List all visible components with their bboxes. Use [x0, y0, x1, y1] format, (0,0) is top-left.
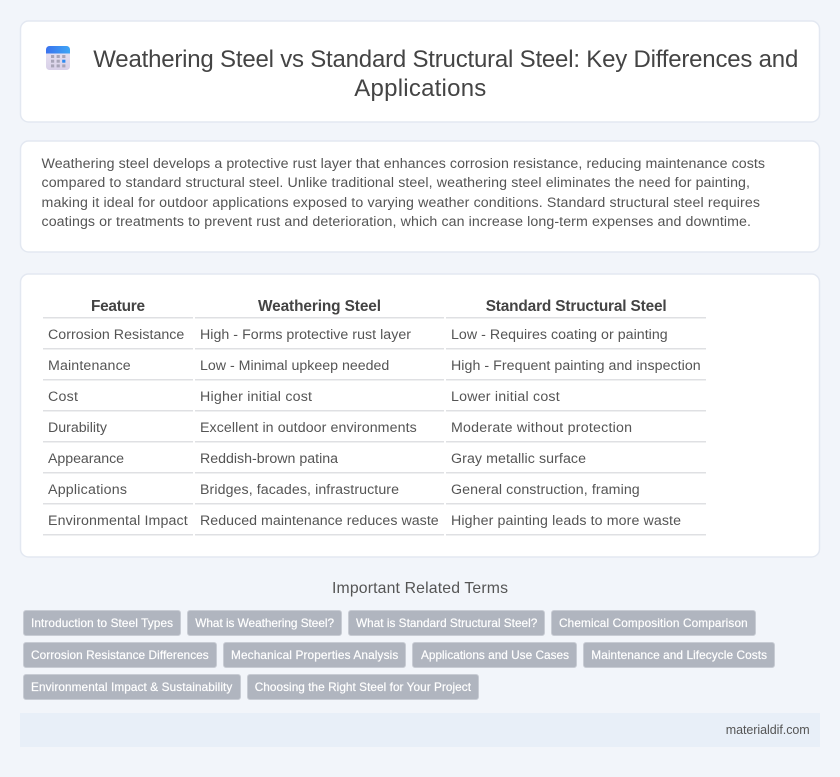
- tag: [584, 642, 774, 668]
- tag: Environmental Impact & Sustainability: [31, 680, 232, 694]
- heading: important related terms: Important Related Terms: [332, 580, 508, 597]
- footer bar: [20, 713, 820, 747]
- table row: environmental impact: Reduced maintenance reduces waste: [200, 513, 439, 529]
- tag: Introduction to Steel Types: [31, 616, 173, 630]
- table row: corrosion resistance: [43, 327, 706, 350]
- text block: summary: coatings or treatments to prevent rust and deterioration, which can increase long-term expenses and downtime.: [42, 214, 751, 230]
- tag: [188, 610, 342, 636]
- table header row: Standard Structural Steel: [486, 298, 667, 315]
- table row: environmental impact: Higher painting leads to more waste: [451, 513, 681, 529]
- tag: What is Weathering Steel?: [195, 616, 334, 630]
- table row: corrosion resistance: Corrosion Resistance: [48, 327, 184, 343]
- title: [93, 46, 798, 102]
- tag: Choosing the Right Steel for Your Project: [255, 680, 472, 694]
- table row: maintenance: High - Frequent painting and inspection: [451, 358, 701, 374]
- tag: [224, 642, 406, 668]
- table row: environmental impact: Environmental Impact: [48, 513, 188, 529]
- table row: durability: Durability: [48, 420, 108, 436]
- tag: What is Standard Structural Steel?: [356, 616, 538, 630]
- tag: [552, 610, 756, 636]
- tag: Mechanical Properties Analysis: [231, 648, 398, 662]
- table row: corrosion resistance: High - Forms protective rust layer: [200, 327, 411, 343]
- footer: site name: materialdif.com: [726, 723, 810, 737]
- table row: cost: Lower initial cost: [451, 389, 560, 405]
- table row: appearance: Appearance: [48, 451, 124, 467]
- table header row: Weathering Steel: [258, 298, 381, 315]
- table row: appearance: [43, 451, 706, 474]
- table row: durability: [43, 420, 706, 442]
- table header row: Feature: [91, 298, 145, 315]
- table header row: [43, 298, 706, 318]
- title: Applications: [354, 75, 486, 102]
- table row: cost: [43, 389, 706, 412]
- table row: cost: Cost: [48, 389, 78, 405]
- panel: header: [20, 21, 820, 122]
- text block: summary: Weathering steel develops a protective rust layer that enhances corrosion resistance, reducing maintenance costs: [42, 156, 765, 172]
- text block: summary: making it ideal for outdoor applications exposed to varying weather conditions. Standard structural steel requires: [42, 195, 760, 211]
- tag: [348, 610, 544, 636]
- table row: maintenance: [43, 358, 706, 380]
- title: Weathering Steel vs Standard Structural Steel: Key Differences and: [93, 46, 798, 73]
- tag: Maintenance and Lifecycle Costs: [591, 648, 767, 662]
- table row: durability: Excellent in outdoor environments: [200, 420, 417, 436]
- tag: [248, 674, 478, 700]
- tag: [24, 610, 180, 636]
- table row: environmental impact: [43, 513, 706, 536]
- panel: comparison table: [20, 274, 820, 557]
- table row: durability: Moderate without protection: [451, 420, 632, 436]
- text block: summary: [42, 156, 765, 230]
- tag list: related terms: [24, 610, 774, 700]
- tag: [24, 642, 216, 668]
- text block: summary: compared to standard structural steel. Unlike traditional steel, weathering steel eliminates the need for painting,: [42, 175, 750, 191]
- table row: applications: [43, 482, 706, 504]
- table row: applications: Applications: [48, 482, 127, 498]
- table row: maintenance: Maintenance: [48, 358, 131, 374]
- table row: cost: Higher initial cost: [200, 389, 312, 405]
- tag: Corrosion Resistance Differences: [31, 648, 209, 662]
- tag: [412, 642, 576, 668]
- table row: maintenance: Low - Minimal upkeep needed: [200, 358, 389, 374]
- table row: applications: Bridges, facades, infrastructure: [200, 482, 399, 498]
- table row: applications: General construction, framing: [451, 482, 640, 498]
- tag: [24, 674, 240, 700]
- table row: appearance: Gray metallic surface: [451, 451, 586, 467]
- panel: summary paragraph: [20, 141, 820, 252]
- table row: appearance: Reddish-brown patina: [200, 451, 338, 467]
- tag: Chemical Composition Comparison: [559, 616, 748, 630]
- icon: calendar: [46, 46, 70, 70]
- tag: Applications and Use Cases: [421, 648, 569, 662]
- table row: corrosion resistance: Low - Requires coating or painting: [451, 327, 668, 343]
